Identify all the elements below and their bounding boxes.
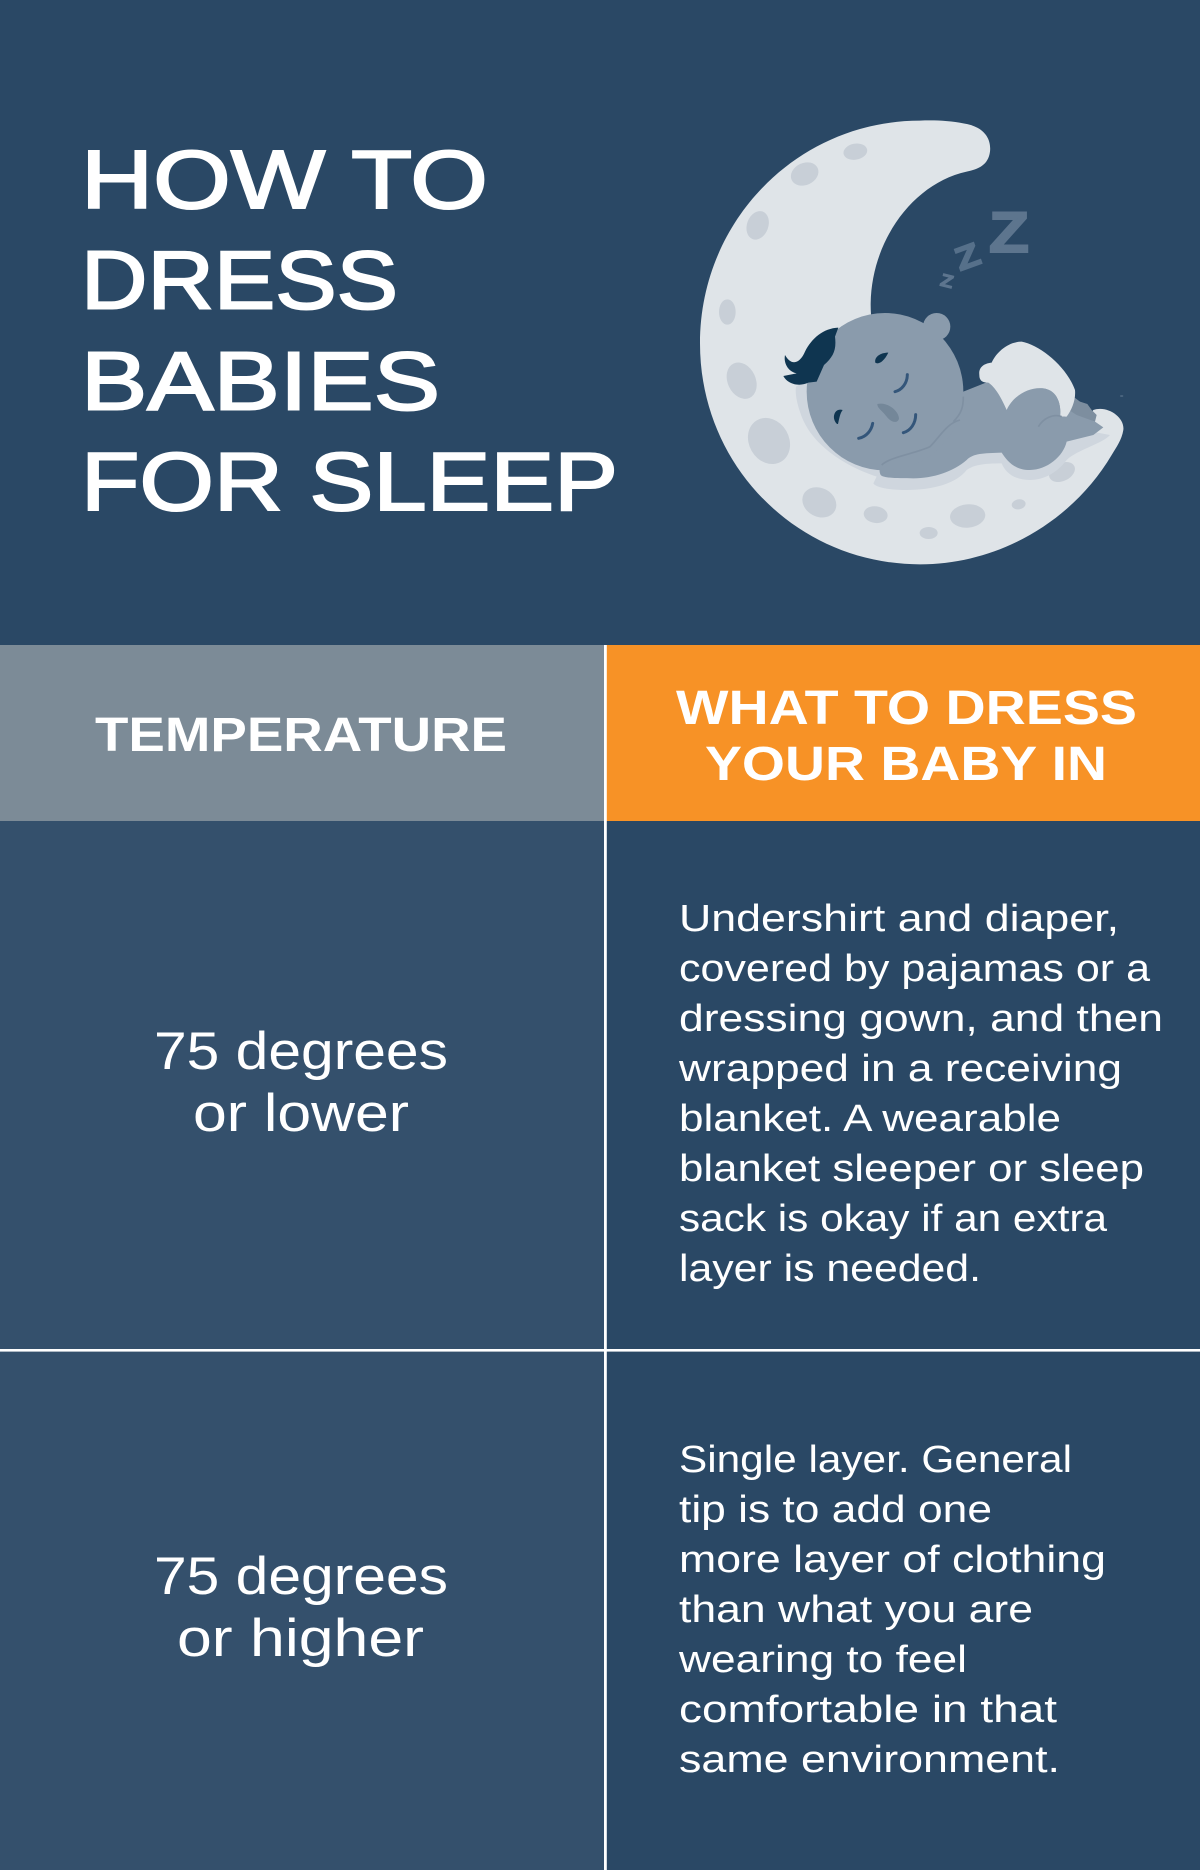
baby body and leg [880,380,1103,478]
panel: what to dress header: YOUR BABY IN [705,738,1107,791]
row 2 temperature: or higher [177,1609,424,1668]
sleep z letters: Z [938,270,955,292]
row 1 clothing advice: Undershirt and diaper, [679,898,1119,940]
title [81,133,618,528]
panel: temperature header [0,645,605,821]
title: HOW TO [81,133,488,226]
row 1 clothing advice: sack is okay if an extra [679,1198,1108,1240]
baby foot toes [1067,397,1097,422]
panel: temperature header: TEMPERATURE [95,709,507,762]
row 1 clothing advice: covered by pajamas or a [679,948,1151,990]
row 2 clothing advice: than what you are [679,1589,1033,1631]
row 2 clothing advice: more layer of clothing [679,1539,1106,1581]
row 2 clothing advice: same environment. [679,1739,1060,1781]
row 1 clothing advice: dressing gown, and then [679,998,1163,1040]
panel: what to dress header [606,645,1200,821]
vertical divider [604,645,607,1870]
speck [1120,395,1123,397]
baby arm lines [882,397,1062,465]
row 2 clothing advice: wearing to feel [678,1639,967,1681]
row 2 clothing advice: comfortable in that [679,1689,1058,1731]
row 1 temperature: or lower [193,1084,409,1143]
row 1 clothing advice: blanket. A wearable [679,1098,1061,1140]
row 2 clothing advice: tip is to add one [679,1489,992,1531]
panel: temperature column background [0,821,605,1870]
baby head [807,313,963,470]
baby eyes and nose [834,353,899,424]
baby ear [923,313,950,340]
row 1 clothing advice: blanket sleeper or sleep [679,1148,1144,1190]
moon [700,120,1123,564]
title: FOR SLEEP [81,435,618,528]
baby shadow [796,377,1110,490]
horizontal divider [0,1349,1200,1352]
row 1 temperature [154,1022,448,1143]
sleep z letters: Z [989,201,1029,265]
row 2 temperature: 75 degrees [154,1547,448,1606]
title: DRESS [81,234,398,326]
sleep z letters: Z [950,236,985,278]
panel: what to dress header: WHAT TO DRESS [676,682,1137,735]
row 1 clothing advice: wrapped in a receiving [678,1048,1122,1090]
moon craters [719,142,1078,539]
row 2 temperature [154,1547,448,1668]
baby diaper [979,342,1075,417]
row 1 clothing advice [678,898,1163,1290]
title: BABIES [81,334,440,428]
row 1 temperature: 75 degrees [154,1022,448,1081]
sleep z letters [938,201,1029,292]
row 2 clothing advice [678,1439,1106,1781]
row 1 clothing advice: layer is needed. [679,1248,981,1290]
baby hair [783,328,838,385]
row 2 clothing advice: Single layer. General [679,1439,1072,1481]
illustration: baby sleeping on moon [700,120,1123,564]
baby face lines [859,375,916,438]
